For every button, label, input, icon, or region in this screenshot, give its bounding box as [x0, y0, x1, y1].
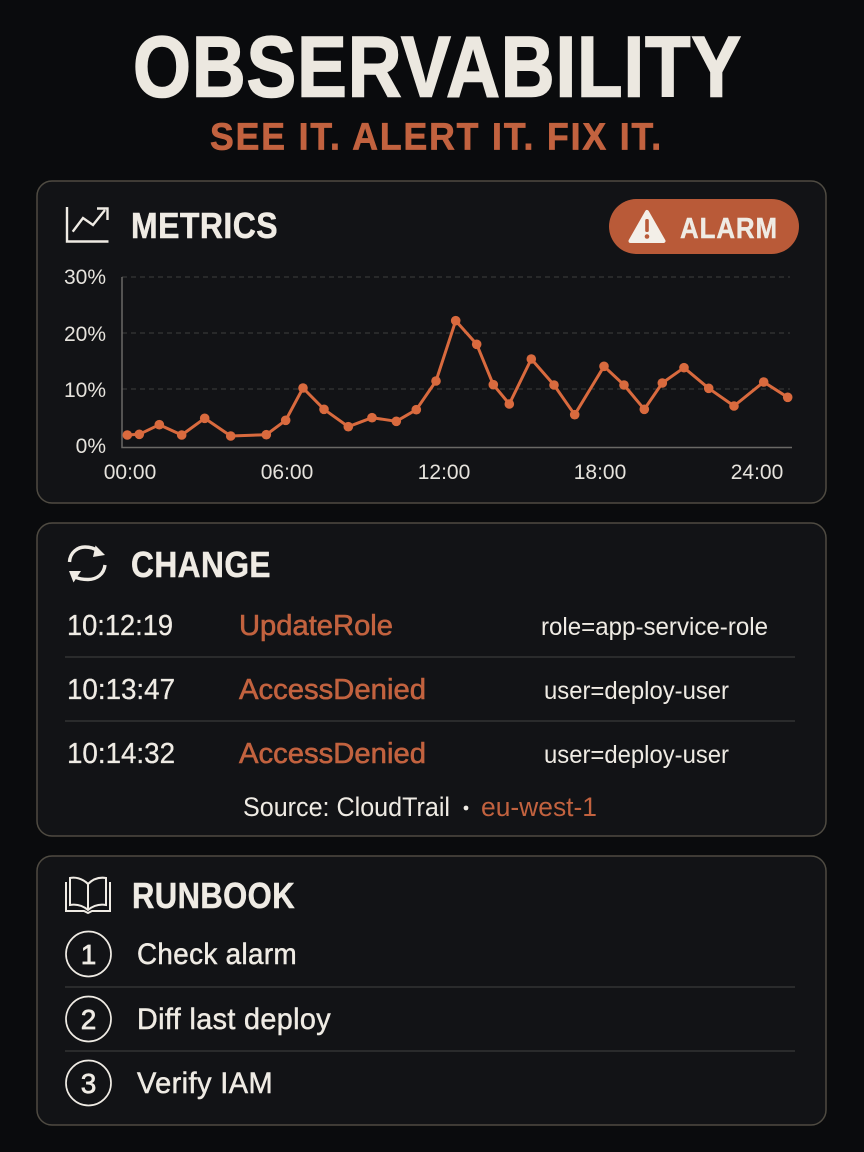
data line [127, 321, 788, 436]
subtitle: SEE IT. ALERT IT. FIX IT. [210, 116, 663, 158]
y axis labels [64, 266, 106, 458]
event row 3 [67, 738, 729, 770]
alarm badge [609, 199, 799, 254]
y axis labels: 30% [64, 266, 106, 289]
y axis labels: 20% [64, 323, 106, 346]
icon: open book [66, 878, 110, 913]
x axis labels: 24:00 [731, 461, 783, 484]
step 2 [66, 996, 331, 1042]
icon: warning triangle [630, 212, 664, 241]
icon: line chart [67, 207, 108, 242]
step 1: Check alarm [137, 938, 297, 971]
panel: metrics [37, 181, 826, 503]
panel: runbook [37, 856, 826, 1125]
runbook heading: RUNBOOK [132, 875, 295, 916]
event row 2 [67, 674, 729, 706]
event row 1 [67, 610, 768, 642]
event row 3: AccessDenied [239, 738, 426, 770]
x axis labels: 06:00 [261, 461, 313, 484]
event row 1: 10:12:19 [67, 610, 173, 642]
data points [122, 316, 792, 441]
event row 3: user=deploy-user [544, 741, 729, 769]
event row 3: 10:14:32 [67, 738, 175, 770]
step 1 [66, 932, 297, 976]
step 3: Verify IAM [137, 1067, 273, 1100]
x axis labels: 00:00 [104, 461, 156, 484]
x axis labels: 12:00 [418, 461, 470, 484]
title: OBSERVABILITY [133, 20, 742, 116]
panel: change [37, 523, 826, 836]
metrics heading: METRICS [131, 205, 278, 246]
event row 1: role=app-service-role [541, 613, 768, 641]
step 3 [66, 1060, 273, 1106]
event row 1: UpdateRole [239, 610, 393, 642]
y axis labels: 0% [76, 435, 106, 458]
event row 2: user=deploy-user [544, 677, 729, 705]
event row 2: 10:13:47 [67, 674, 175, 706]
line chart [64, 266, 792, 484]
alarm label: ALARM [680, 213, 778, 245]
step 2: 2 [81, 1004, 96, 1035]
event row 2: AccessDenied [239, 674, 426, 706]
x axis labels: 18:00 [574, 461, 626, 484]
source line: eu-west-1 [481, 792, 597, 822]
y axis labels: 10% [64, 379, 106, 402]
step 2: Diff last deploy [137, 1003, 331, 1036]
source line: Source: CloudTrail [243, 792, 450, 822]
source line [243, 792, 597, 822]
change heading: CHANGE [131, 544, 271, 585]
step 1: 1 [81, 939, 96, 970]
x axis labels [104, 461, 783, 484]
icon: refresh arrows [69, 546, 105, 582]
step 3: 3 [81, 1068, 96, 1099]
